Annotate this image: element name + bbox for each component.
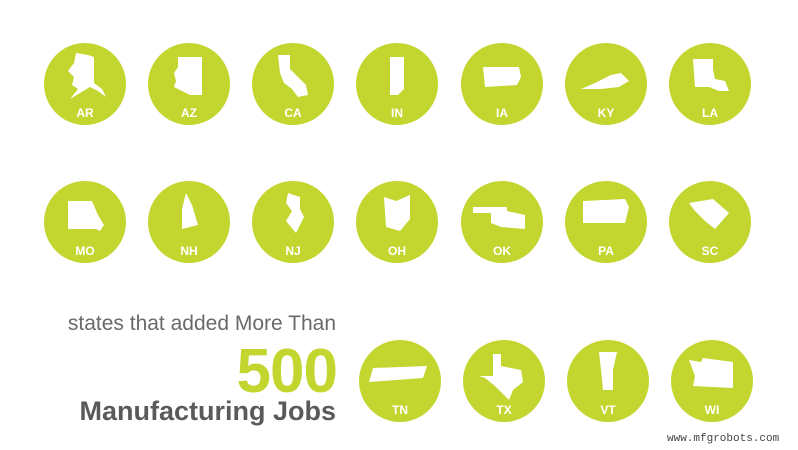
circle TN bbox=[359, 340, 441, 422]
watermark: www.mfgrobots.com bbox=[667, 433, 779, 445]
circle TX bbox=[463, 340, 545, 422]
circle CA bbox=[252, 43, 334, 125]
circle MO bbox=[44, 181, 126, 263]
circle TN: TN bbox=[392, 403, 408, 417]
circle OH bbox=[356, 181, 438, 263]
circle KY bbox=[565, 43, 647, 125]
text: big number 500: 500 bbox=[237, 337, 337, 406]
circle KY: KY bbox=[598, 106, 614, 120]
circle AR: AR bbox=[76, 106, 94, 120]
circle AR bbox=[44, 43, 126, 125]
circle IN bbox=[356, 43, 438, 125]
circle IA: IA bbox=[496, 106, 508, 120]
circle LA: LA bbox=[702, 106, 718, 120]
circle IA bbox=[461, 43, 543, 125]
text: Manufacturing Jobs: Manufacturing Jobs bbox=[79, 396, 336, 426]
circle NJ: NJ bbox=[285, 244, 301, 258]
circle PA bbox=[565, 181, 647, 263]
circle NH: NH bbox=[180, 244, 198, 258]
circle OK bbox=[461, 181, 543, 263]
circle NJ bbox=[252, 181, 334, 263]
circle AZ bbox=[148, 43, 230, 125]
circle TX: TX bbox=[496, 403, 512, 417]
circle OH: OH bbox=[388, 244, 406, 258]
circle PA: PA bbox=[598, 244, 614, 258]
circle SC bbox=[669, 181, 751, 263]
circle WI: WI bbox=[705, 403, 719, 417]
circle WI bbox=[671, 340, 753, 422]
text: subtitle: states that added More Than bbox=[68, 312, 336, 335]
circle LA bbox=[669, 43, 751, 125]
circle VT bbox=[567, 340, 649, 422]
circle MO: MO bbox=[75, 244, 95, 258]
circle NH bbox=[148, 181, 230, 263]
circle IN: IN bbox=[391, 106, 403, 120]
circle AZ: AZ bbox=[181, 106, 197, 120]
circle VT: VT bbox=[600, 403, 616, 417]
circle OK: OK bbox=[493, 244, 511, 258]
circle CA: CA bbox=[284, 106, 302, 120]
circle SC: SC bbox=[702, 244, 718, 258]
